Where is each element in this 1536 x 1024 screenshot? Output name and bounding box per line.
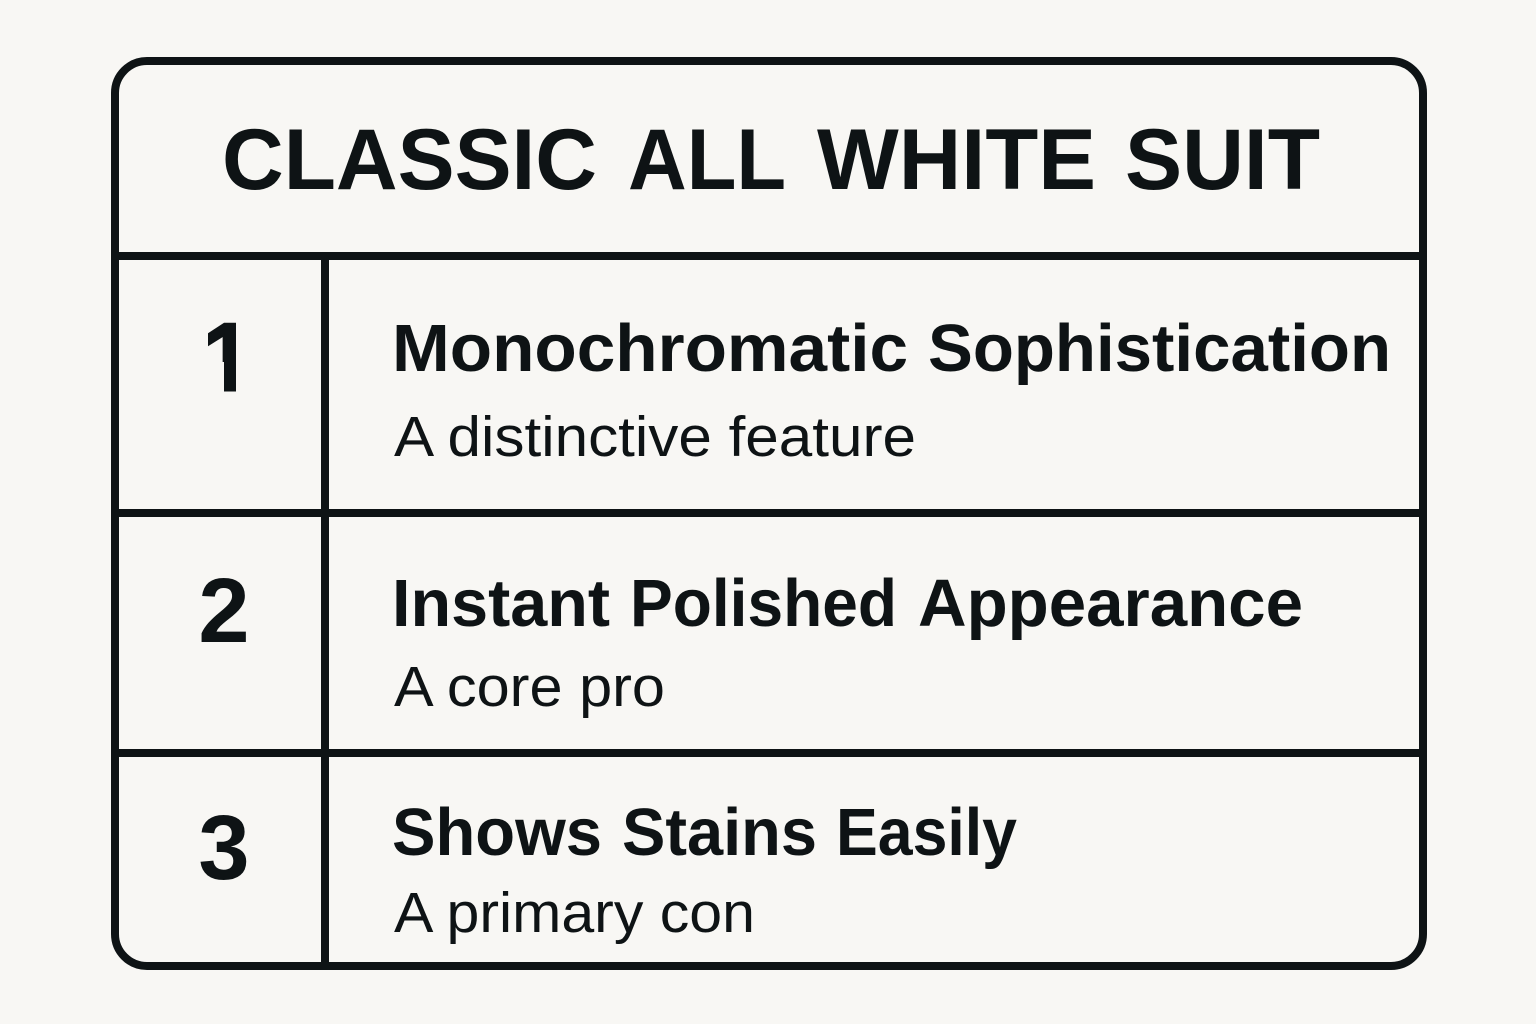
row 1 <box>208 322 1387 456</box>
row 3 heading: Easily <box>836 795 1017 870</box>
row 1 number: 1 <box>201 302 255 412</box>
row 2 heading: Instant <box>392 566 610 641</box>
row 1 heading: Monochromatic <box>392 311 908 386</box>
row 2 heading: Polished <box>630 566 897 641</box>
row 3 number: 3 <box>198 797 250 899</box>
infographic canvas <box>111 57 1427 970</box>
row 3 heading: Stains <box>622 795 817 870</box>
row 2 heading <box>392 566 1303 641</box>
row 1 heading <box>392 311 1391 386</box>
row 1 heading: Sophistication <box>928 311 1391 386</box>
row 3 description: A primary con <box>394 881 755 945</box>
row 3 heading: Shows <box>392 795 602 870</box>
row 2 number: 2 <box>198 560 250 662</box>
title <box>222 112 1320 208</box>
row 3 <box>198 795 1017 945</box>
table frame <box>115 61 1423 966</box>
row 2 description: A core pro <box>394 655 665 719</box>
title: ALL <box>628 112 786 208</box>
title: CLASSIC <box>222 112 597 208</box>
row 2 <box>198 560 1303 719</box>
title: SUIT <box>1125 112 1320 208</box>
row 3 heading <box>392 795 1017 870</box>
row 1 description: A distinctive feature <box>394 405 916 469</box>
row 2 heading: Appearance <box>918 566 1303 641</box>
title: WHITE <box>817 112 1096 208</box>
